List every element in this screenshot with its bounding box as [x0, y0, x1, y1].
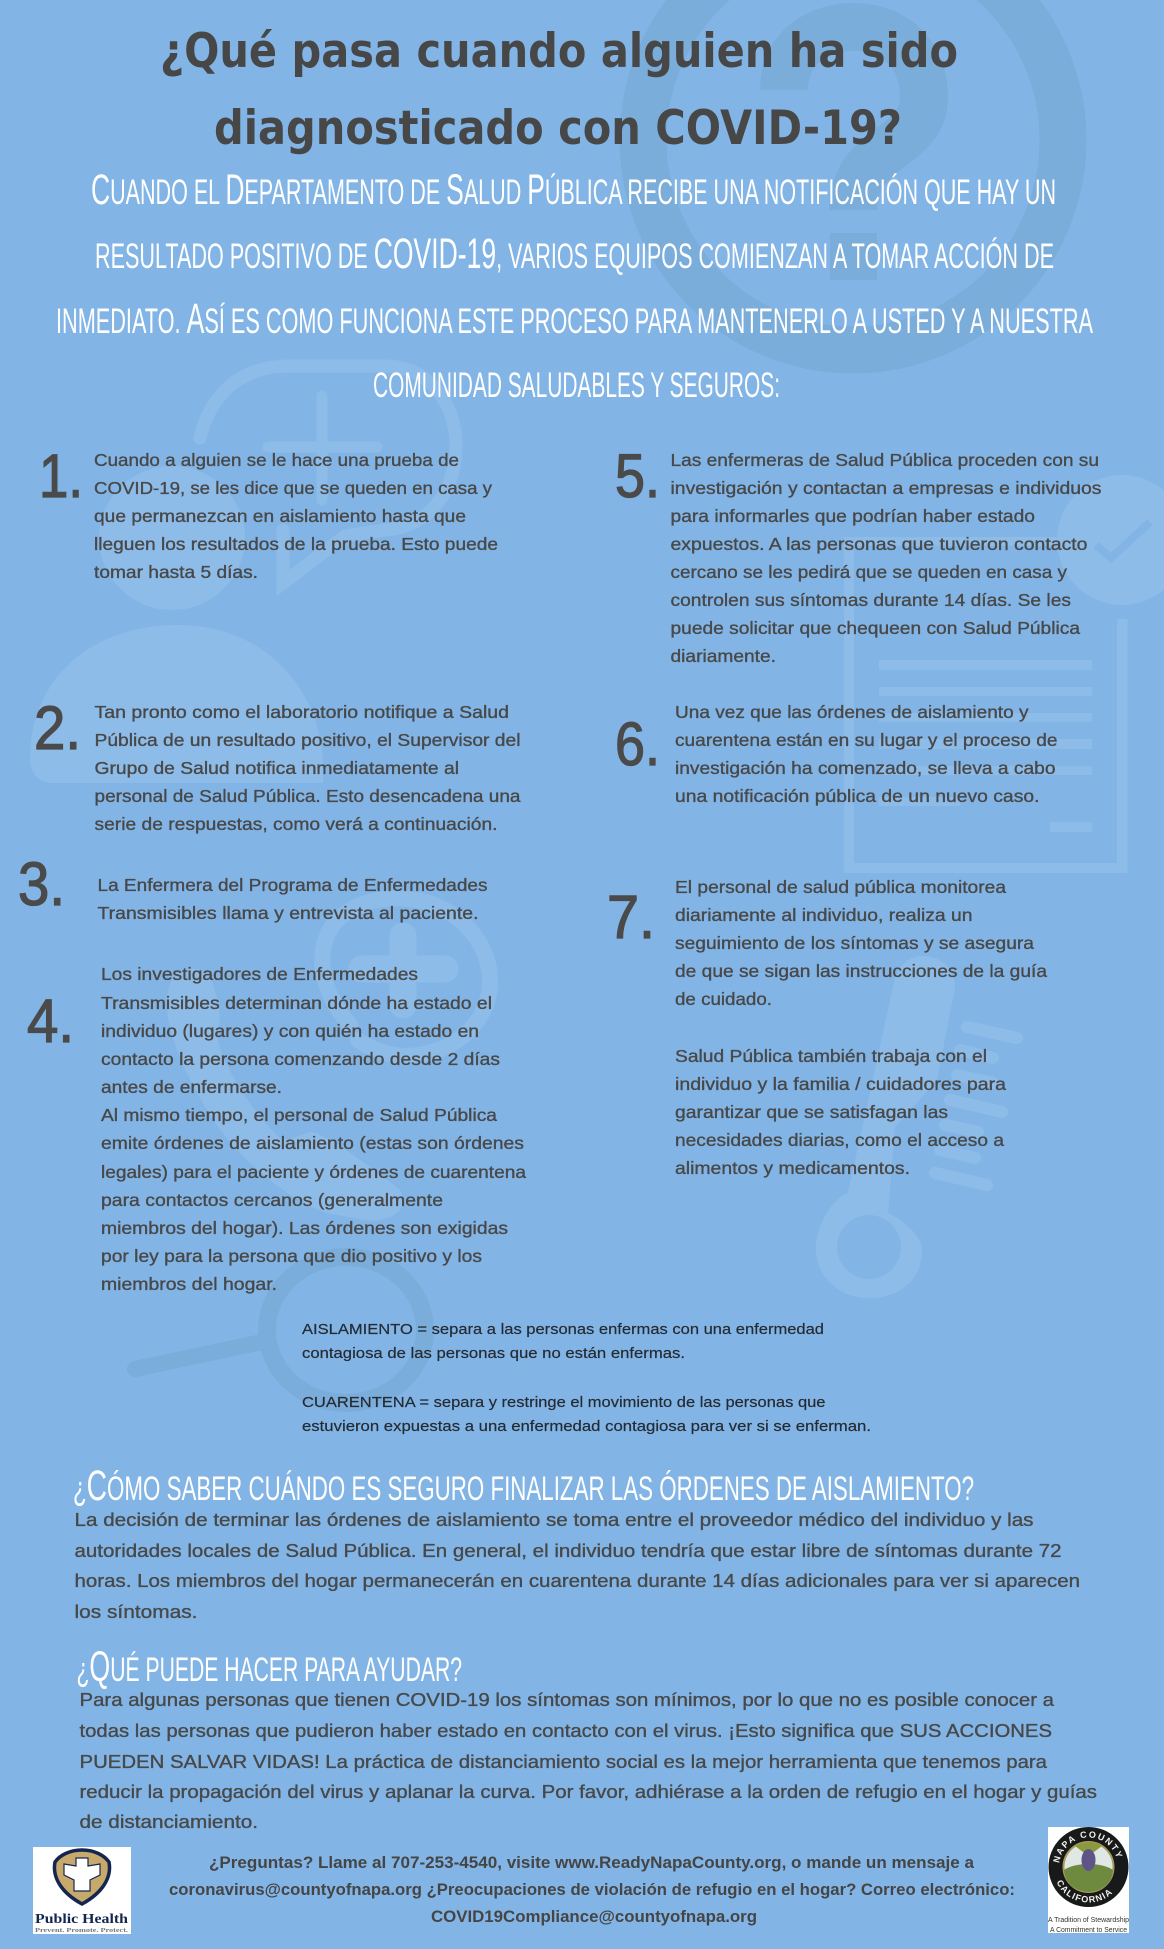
icon: person silhouette [30, 466, 323, 783]
step 4 text: Transmisibles determinan dónde ha estado el [101, 993, 492, 1013]
footer contact text [169, 1853, 1015, 1926]
step 2 text: Grupo de Salud notifica inmediatamente al [94, 758, 459, 778]
step 1 text: COVID-19, se les dice que se queden en casa y [94, 478, 492, 498]
step 4 text: contacto la persona comenzando desde 2 días [101, 1049, 500, 1069]
seal: CALIFORNIA [1057, 1880, 1112, 1903]
step 7 text: garantizar que se satisfagan las [675, 1102, 948, 1122]
step 4 text: Los investigadores de Enfermedades [101, 964, 418, 984]
paragraph: how to help: todas las personas que pudieron haber estado en contacto con el virus. ¡Esto significa que SUS ACCIONES [80, 1720, 1052, 1741]
footer contact text: coronavirus@countyofnapa.org ¿Preocupaciones de violación de refugio en el hogar? Correo electrónico: [169, 1880, 1015, 1899]
step 7 text: de cuidado. [675, 989, 772, 1009]
step 7 text: El personal de salud pública monitorea [675, 877, 1006, 897]
step 7 text: necesidades diarias, como el acceso a [675, 1130, 1004, 1150]
step 2 text: Pública de un resultado positivo, el Supervisor del [94, 730, 520, 750]
logo: Public Health: Public Health [35, 1912, 128, 1927]
intro subtitle: COMUNIDAD SALUDABLES Y SEGUROS: [373, 366, 780, 405]
seal: NAPA COUNTY [1053, 1832, 1122, 1863]
step 2 text: serie de respuestas, como verá a continuación. [94, 814, 498, 834]
step 3 [18, 850, 488, 923]
step 5 text: investigación y contactan a empresas e individuos [670, 478, 1102, 498]
step 3 text: La Enfermera del Programa de Enfermedades [98, 875, 488, 895]
number 4: 4. [27, 987, 74, 1055]
step 4 text: Al mismo tiempo, el personal de Salud Pública [101, 1105, 497, 1125]
intro subtitle [56, 166, 1093, 405]
step 5 text [670, 450, 1102, 666]
step 5 text: cercano se les pedirá que se queden en casa y [670, 562, 1067, 582]
step 5 text: puede solicitar que chequeen con Salud Pública [670, 618, 1080, 638]
paragraph: ending isolation [74, 1509, 1080, 1622]
paragraph: how to help [80, 1689, 1097, 1832]
paragraph: ending isolation: autoridades locales de Salud Pública. En general, el individuo tendría que estar libre de síntomas durante 72 [74, 1540, 1062, 1561]
step 2 text: Tan pronto como el laboratorio notifique a Salud [94, 702, 509, 722]
logo: Napa County seal: A Commitment to Service [1050, 1927, 1127, 1934]
number 6: 6. [615, 710, 660, 778]
step 5 text: controlen sus síntomas durante 14 días. Se les [670, 590, 1071, 610]
step 4 text [101, 964, 526, 1294]
paragraph: how to help: de distanciamiento. [80, 1811, 258, 1832]
icon: telephone handset [167, 969, 403, 1220]
icon: medical plus in ring [322, 898, 490, 1056]
step 4 text: miembros del hogar). Las órdenes son exigidas [101, 1218, 508, 1238]
logo: Napa County seal: A Tradition of Stewardship [1048, 1917, 1129, 1924]
shield emblem [54, 1850, 110, 1904]
step 1 text: tomar hasta 5 días. [94, 562, 258, 582]
icon: thermometer [816, 956, 1017, 1298]
step 7 text: seguimiento de los síntomas y se asegura [675, 933, 1034, 953]
step 5 text: expuestos. A las personas que tuvieron contacto [670, 534, 1088, 554]
step 7 text [675, 877, 1047, 1178]
step 6 [615, 702, 1058, 806]
step 1 text: Cuando a alguien se le hace una prueba de [94, 450, 459, 470]
paragraph: ending isolation: horas. Los miembros del hogar permanecerán en cuarentena durante 14 días adicionales para ver si aparecen [74, 1570, 1080, 1591]
step 7 text: alimentos y medicamentos. [675, 1158, 910, 1178]
logo: Napa County seal [1048, 1827, 1129, 1934]
step 3 text: Transmisibles llama y entrevista al paciente. [98, 903, 478, 923]
step 2 text: personal de Salud Pública. Esto desencadena una [94, 786, 521, 806]
title: diagnosticado con COVID-19? [214, 101, 902, 156]
title: ¿Qué pasa cuando alguien ha sido [160, 24, 958, 79]
logo: Public Health [33, 1847, 131, 1934]
footer contact text: COVID19Compliance@countyofnapa.org [431, 1907, 757, 1926]
step 5 text: para informarles que podrían haber estado [670, 506, 1035, 526]
definitions: aislamiento and cuarentena: AISLAMIENTO = separa a las personas enfermas con una enfermedad [302, 1321, 824, 1338]
step 6 text: Una vez que las órdenes de aislamiento y [675, 702, 1029, 722]
step 1 text: que permanezcan en aislamiento hasta que [94, 506, 466, 526]
step 4 text: para contactos cercanos (generalmente [101, 1190, 443, 1210]
number 1: 1. [39, 442, 83, 510]
paragraph: ending isolation: La decisión de terminar las órdenes de aislamiento se toma entre el proveedor médico del individuo y las [74, 1509, 1034, 1530]
step 5 text: Las enfermeras de Salud Pública proceden con su [670, 450, 1099, 470]
paragraph: how to help: reducir la propagación del virus y aplanar la curva. Por favor, adhiérase a la orden de refugio en el hogar y guías [80, 1781, 1097, 1802]
number 5: 5. [615, 442, 660, 510]
definitions: aislamiento and cuarentena: contagiosa de las personas que no están enfermas. [302, 1345, 685, 1362]
step 4 text: emite órdenes de aislamiento (estas son órdenes [101, 1133, 524, 1153]
step 6 text: investigación ha comenzado, se lleva a cabo [675, 758, 1056, 778]
number 2: 2. [34, 694, 81, 762]
number 7: 7. [607, 883, 655, 951]
definitions: aislamiento and cuarentena: CUARENTENA = separa y restringe el movimiento de las personas que [302, 1394, 826, 1411]
definitions: aislamiento and cuarentena [302, 1321, 871, 1435]
footer contact text: ¿Preguntas? Llame al 707-253-4540, visite www.ReadyNapaCounty.org, o mande un mensaje a [209, 1853, 975, 1872]
step 7 [607, 877, 1047, 1178]
step 7 text: individuo y la familia / cuidadores para [675, 1074, 1006, 1094]
step 2 text [94, 702, 521, 834]
step 3 text [98, 875, 488, 923]
step 5 [615, 442, 1102, 666]
seal [1048, 1827, 1128, 1907]
step 7 text: de que se sigan las instrucciones de la guía [675, 961, 1047, 981]
paragraph: how to help: PUEDEN SALVAR VIDAS! La práctica de distanciamiento social es la mejor herramienta que tenemos para [80, 1751, 1048, 1772]
logo: Public Health: Prevent. Promote. Protect. [35, 1928, 129, 1934]
step 4 text: antes de enfermarse. [101, 1077, 282, 1097]
step 6 text: cuarentena están en su lugar y el proceso de [675, 730, 1058, 750]
step 4 [27, 964, 526, 1294]
step 4 text: por ley para la persona que dio positivo y los [101, 1246, 482, 1266]
step 7 text: Salud Pública también trabaja con el [675, 1046, 987, 1066]
step 5 text: diariamente. [670, 646, 776, 666]
step 1 text: lleguen los resultados de la prueba. Esto puede [94, 534, 498, 554]
icon: magnifying glass [135, 1257, 425, 1403]
step 2 [34, 694, 521, 834]
step 6 text [675, 702, 1058, 806]
number 3: 3. [18, 850, 65, 918]
paragraph: ending isolation: los síntomas. [74, 1601, 198, 1622]
icon: question mark in ring [643, 0, 1063, 350]
icon: clipboard document [844, 537, 1128, 873]
step 4 text: legales) para el paciente y órdenes de cuarentena [101, 1162, 526, 1182]
step 6 text: una notificación pública de un nuevo caso. [675, 786, 1040, 806]
definitions: aislamiento and cuarentena: estuvieron expuestas a una enfermedad contagiosa para ver si se enferman. [302, 1418, 871, 1435]
step 1 text [94, 450, 498, 582]
step 4 text: individuo (lugares) y con quién ha estado en [101, 1021, 479, 1041]
step 4 text: miembros del hogar. [101, 1274, 277, 1294]
step 7 text: diariamente al individuo, realiza un [675, 905, 972, 925]
step 1 [39, 442, 498, 582]
paragraph: how to help: Para algunas personas que tienen COVID-19 los síntomas son mínimos, por lo que no es posible conocer a [80, 1689, 1055, 1710]
title [160, 24, 958, 156]
heading: how to help: ¿QUÉ PUEDE HACER PARA AYUDAR? [76, 1643, 462, 1691]
icon: speech bubble with plus [200, 366, 456, 583]
icon: check circle [1057, 475, 1164, 605]
